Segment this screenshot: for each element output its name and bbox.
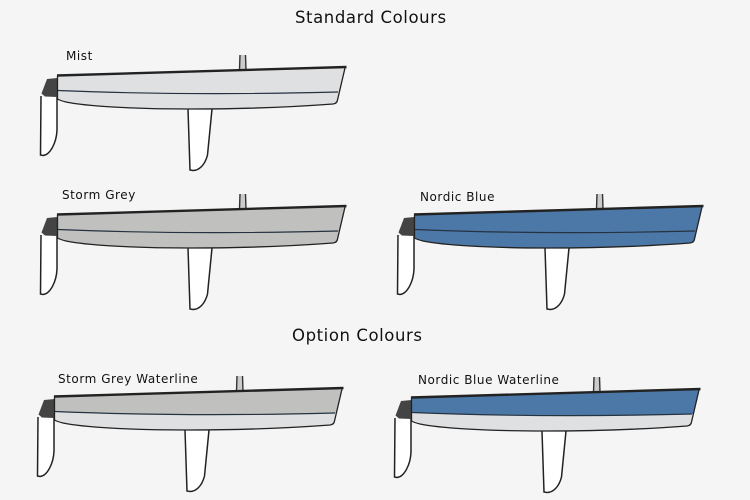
label: Nordic Blue: Nordic Blue — [420, 190, 495, 204]
boat: Nordic Blue — [398, 194, 704, 310]
boat: Storm Grey — [40, 194, 346, 310]
label: Nordic Blue Waterline: Nordic Blue Waterline — [418, 373, 559, 387]
label: Storm Grey: Storm Grey — [62, 188, 136, 202]
heading: Option Colours: Option Colours — [292, 326, 423, 345]
boat: Nordic Blue Waterline — [394, 377, 700, 492]
boat: Storm Grey Waterline — [38, 376, 344, 492]
heading: Standard Colours: Standard Colours — [295, 8, 447, 27]
label: Mist: Mist — [66, 49, 93, 63]
label: Storm Grey Waterline: Storm Grey Waterline — [58, 372, 198, 386]
boat: Mist — [40, 55, 346, 170]
